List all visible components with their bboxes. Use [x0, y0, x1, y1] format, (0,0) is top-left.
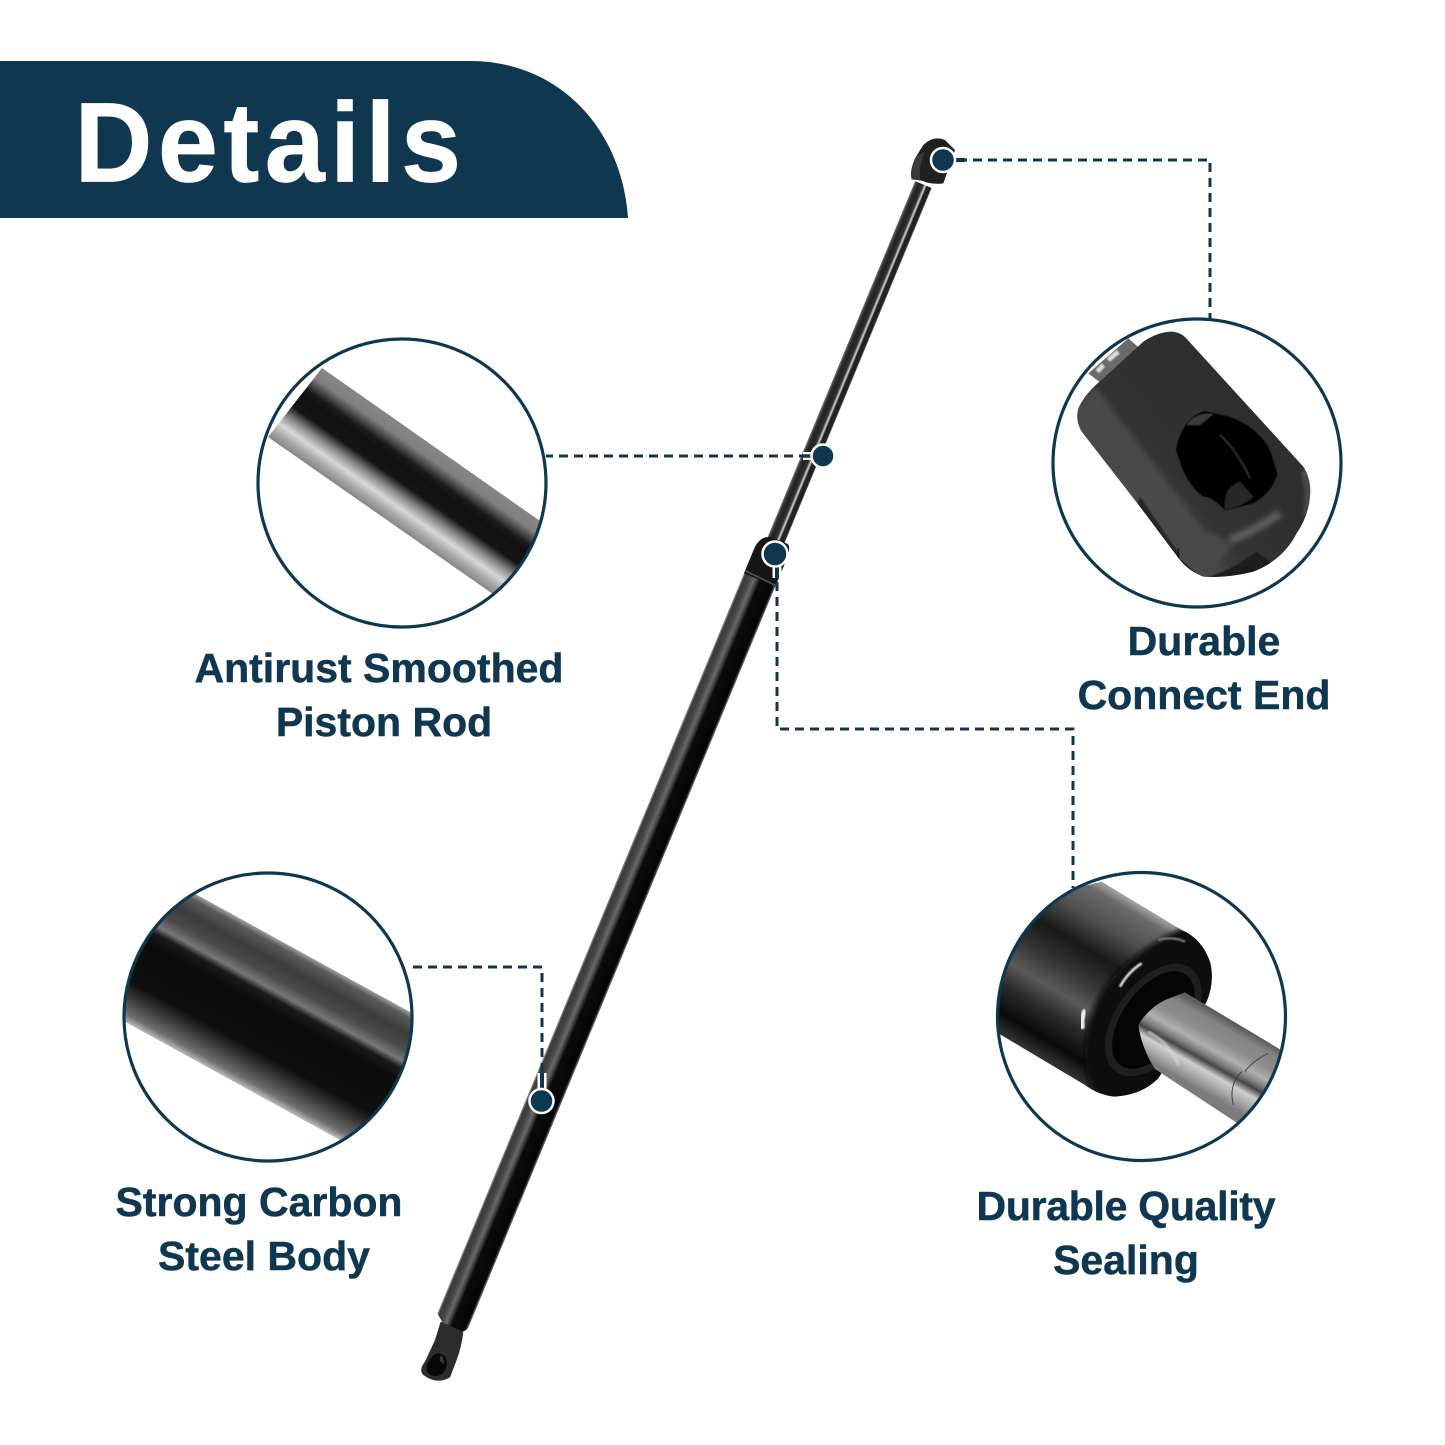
detail photo: steel cylinder: [126, 894, 410, 1140]
gas strut product: [421, 138, 955, 1381]
label: Strong Carbon Steel Body: [116, 1179, 402, 1279]
piston rod and cylinder: [434, 178, 939, 1335]
panel: durable connect end: [1053, 319, 1341, 718]
panel: durable quality sealing: [976, 872, 1286, 1283]
panel: antirust smoothed piston rod: [195, 339, 563, 745]
leader line: piston rod: [546, 454, 808, 458]
marker dot: connect end: [931, 148, 965, 172]
label: Durable Quality Sealing: Sealing: [1053, 1237, 1199, 1283]
circle outline: [124, 873, 412, 1161]
bottom connector end: [421, 1322, 463, 1381]
leader line: sealing: [777, 582, 1073, 888]
title banner: [0, 61, 628, 218]
marker dot: sealing: [762, 542, 788, 578]
circle outline: [1053, 319, 1341, 607]
circle outline: [998, 872, 1286, 1160]
circle outline: [258, 339, 546, 627]
leader line: carbon steel body: [410, 967, 542, 1072]
label: Durable Quality Sealing: [976, 1183, 1276, 1283]
label: Durable Connect End: Connect End: [1078, 672, 1330, 718]
detail photo: polished rod: [268, 368, 540, 594]
label: Antirust Smoothed Piston Rod: Piston Rod: [276, 699, 492, 745]
label: Strong Carbon Steel Body: Steel Body: [158, 1233, 370, 1279]
label: Durable Connect End: Durable: [1128, 618, 1280, 664]
label: Strong Carbon Steel Body: Strong Carbon: [116, 1179, 402, 1225]
banner shape: [0, 61, 628, 218]
detail photo: plastic connector: [1073, 332, 1310, 587]
heading: Details: Details: [74, 80, 466, 206]
label: Durable Connect End: [1078, 618, 1330, 718]
marker dot: piston rod: [803, 444, 834, 468]
top connector end: [911, 138, 955, 184]
label: Antirust Smoothed Piston Rod: Antirust Smoothed: [195, 645, 563, 691]
leader line: connect end: [958, 160, 1210, 318]
label: Durable Quality Sealing: Durable Quality: [976, 1183, 1276, 1229]
panel: strong carbon steel body: [116, 871, 414, 1279]
detail photo: cylinder seal and piston: [985, 882, 1285, 1152]
label: Antirust Smoothed Piston Rod: [195, 645, 563, 745]
marker dot: carbon steel body: [530, 1073, 554, 1113]
